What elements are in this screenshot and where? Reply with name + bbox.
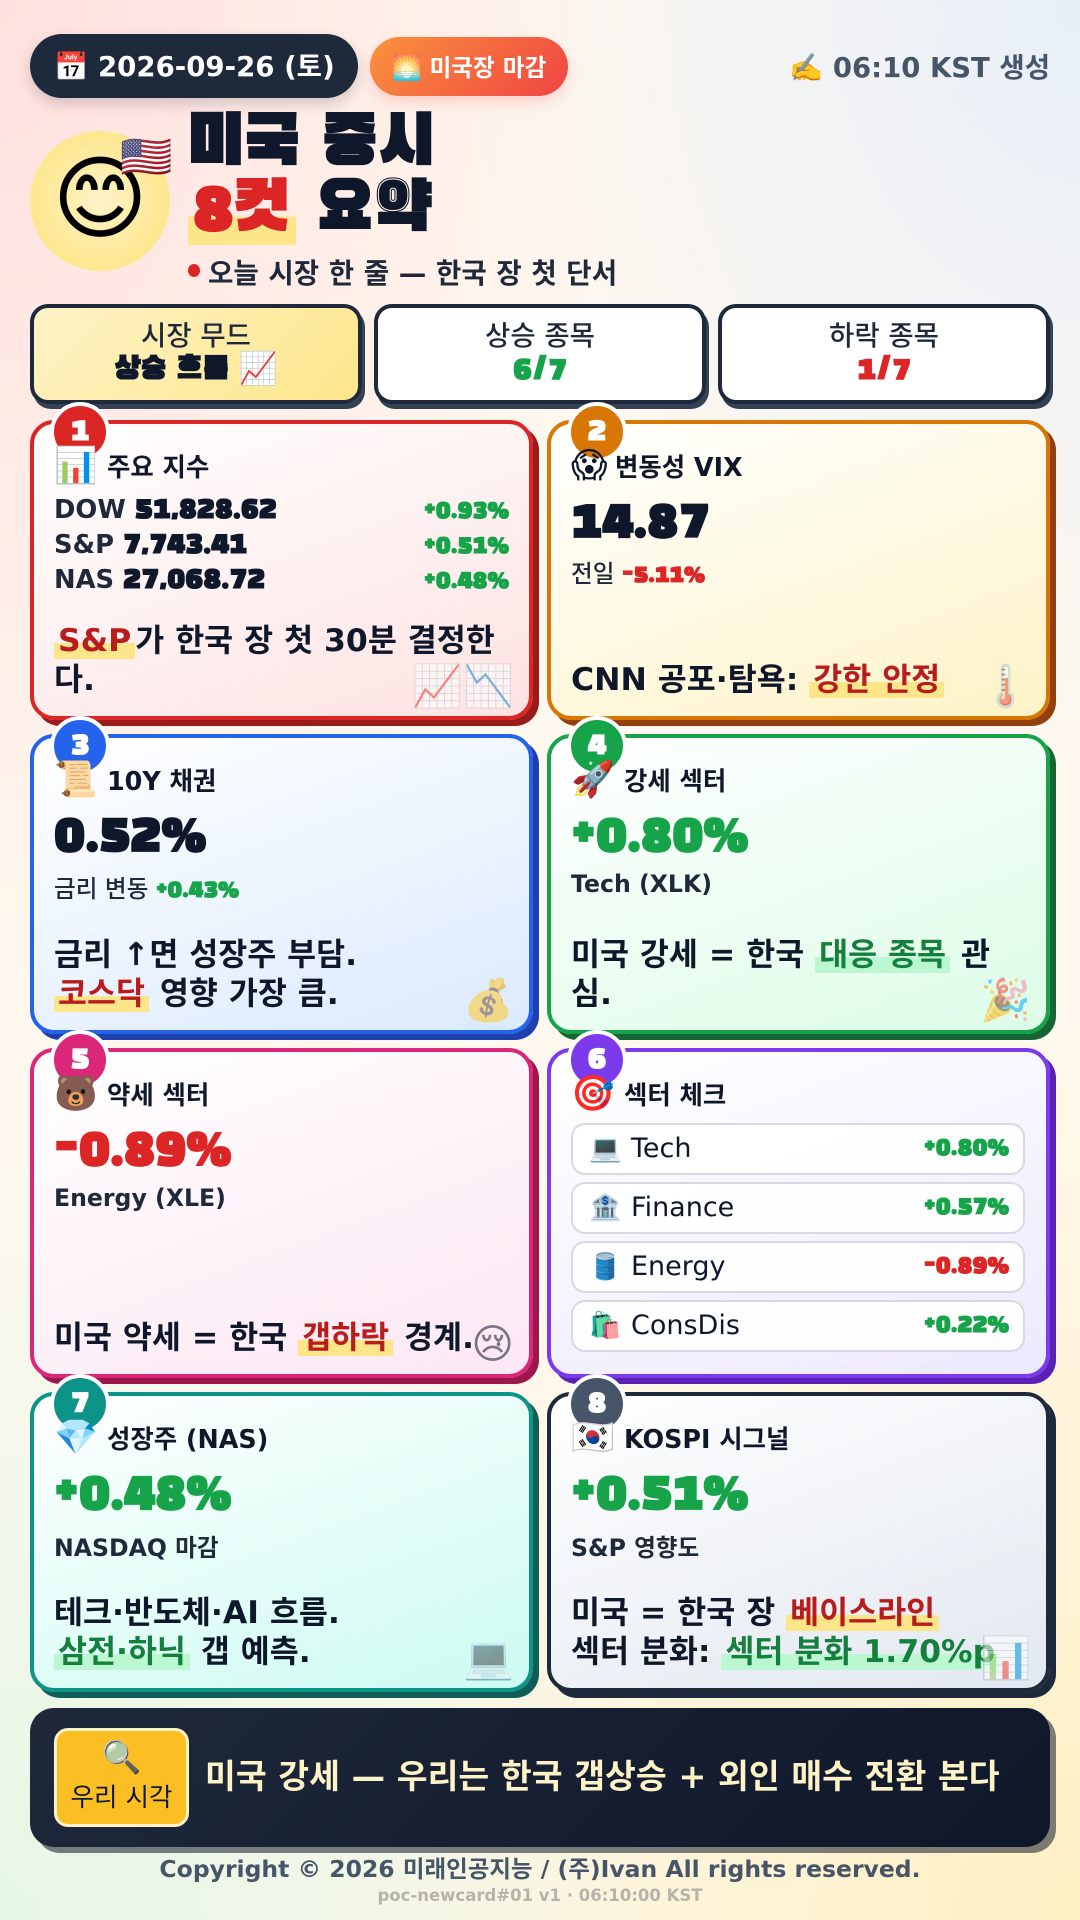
index row: DOW: DOW 51,828.62 [54, 495, 277, 525]
panel: growth stocks [30, 1392, 533, 1692]
sector row: Tech: 💻 [589, 1134, 621, 1164]
panel: 10Y bond [30, 734, 533, 1034]
badge 1: 1 [71, 416, 89, 447]
sector name: Tech (XLK) [571, 870, 712, 898]
badge 3 [50, 716, 110, 776]
card heading [54, 760, 216, 800]
strong sector value: +0.80% [571, 810, 748, 862]
card heading: 주요 지수 [107, 452, 209, 482]
icon: charts: 📈📉 [412, 662, 514, 710]
badge 6 [567, 1030, 627, 1090]
takeaway: 미국 약세 = 한국 갭하락 경계. [54, 1320, 474, 1356]
badge 2 [567, 402, 627, 462]
card heading [571, 1074, 726, 1114]
badge 4 [567, 716, 627, 776]
sector row: Tech: Tech [631, 1133, 691, 1164]
index row: S&P [54, 530, 509, 560]
card heading [571, 446, 743, 486]
takeaway: 금리 ↑면 성장주 부담. [54, 937, 357, 973]
build stamp: poc-newcard#01 v1 · 06:10:00 KST [377, 1886, 703, 1905]
index row: S&P: +0.51% [424, 534, 509, 559]
card heading: 📜 [54, 760, 98, 800]
badge 4: 4 [588, 730, 606, 761]
rate change: 금리 변동 +0.43% [54, 875, 239, 903]
badge 7: 7 [71, 1388, 89, 1419]
sector row: Energy: Energy [631, 1251, 726, 1282]
NASDAQ value: +0.48% [54, 1468, 231, 1520]
card heading: 📊 [54, 446, 98, 486]
label: 우리 시각 [71, 1783, 172, 1813]
takeaway: 섹터 분화: 섹터 분화 1.70%p [571, 1634, 995, 1670]
index row: DOW [54, 495, 509, 525]
card heading: 🇰🇷 [571, 1418, 615, 1458]
sector row: ConsDis: +0.22% [924, 1313, 1009, 1338]
panel: strong sector [547, 734, 1050, 1034]
status pill: US market closed: 🌅 미국장 마감 [392, 54, 546, 82]
badge 3: 3 [71, 730, 89, 761]
card heading: 성장주 (NAS) [107, 1424, 268, 1454]
badge 8 [567, 1374, 627, 1434]
icon: thermometer: 🌡️ [980, 662, 1031, 710]
our view label [54, 1728, 189, 1827]
date pill: 📅 2026-09-26 (토) [54, 50, 335, 83]
date pill [30, 34, 358, 98]
takeaway: 미국 = 한국 장 베이스라인 [571, 1595, 935, 1631]
takeaway: 미국 강세 = 한국 대응 종목 관심. [571, 937, 990, 1012]
mascot avatar [30, 131, 170, 271]
badge 2: 2 [588, 416, 606, 447]
card heading: 🐻 [54, 1074, 98, 1114]
weak sector value: -0.89% [54, 1124, 231, 1176]
icon: laptop: 💻 [463, 1634, 514, 1682]
panel: sector check [547, 1048, 1050, 1378]
badge 8: 8 [588, 1388, 606, 1419]
takeaway [571, 1595, 999, 1670]
KOSPI value: +0.51% [571, 1468, 748, 1520]
sector row: Energy [571, 1241, 1025, 1293]
sector row: Finance [571, 1182, 1025, 1234]
sub label: S&P 영향도 [571, 1534, 699, 1562]
sector row: ConsDis: ConsDis [631, 1310, 740, 1341]
stat: gainers [374, 304, 706, 404]
yield value: 0.52% [54, 810, 206, 862]
takeaway: 테크·반도체·AI 흐름. [54, 1595, 340, 1631]
icon: US flag: 🇺🇸 [120, 132, 172, 181]
tagline [188, 257, 617, 290]
card heading: 섹터 체크 [624, 1080, 726, 1110]
card heading: 🚀 [571, 760, 615, 800]
card heading: 변동성 VIX [615, 452, 743, 482]
title: 8컷 요약 [193, 177, 431, 245]
card heading: 🎯 [571, 1074, 615, 1114]
card heading [571, 760, 726, 800]
card heading: 😱 [571, 446, 608, 486]
index row: NAS: NAS 27,068.72 [54, 565, 265, 595]
sector row: Tech [571, 1123, 1025, 1175]
takeaway [54, 937, 357, 1012]
sector row: Finance: +0.57% [924, 1195, 1009, 1220]
stat: market mood [30, 304, 362, 404]
sector name: Energy (XLE) [54, 1184, 226, 1212]
sector row: ConsDis [571, 1300, 1025, 1352]
card heading: 💎 [54, 1418, 98, 1458]
badge 1 [50, 402, 110, 462]
panel: KOSPI signal [547, 1392, 1050, 1692]
card heading: 10Y 채권 [107, 766, 216, 796]
icon: money bag: 💰 [463, 976, 514, 1024]
panel: weak sector [30, 1048, 533, 1378]
sector row: Energy: -0.89% [924, 1254, 1009, 1279]
index row: NAS: +0.48% [424, 569, 509, 594]
index row: S&P: S&P 7,743.41 [54, 530, 247, 560]
VIX value: 14.87 [571, 496, 710, 548]
card heading [54, 1418, 268, 1458]
stat: losers: 1/7 [857, 354, 911, 386]
icon: party popper: 🎉 [980, 976, 1031, 1024]
title: 미국 증시 [188, 111, 434, 179]
sub label: NASDAQ 마감 [54, 1534, 219, 1562]
badge 5 [50, 1030, 110, 1090]
card heading: KOSPI 시그널 [624, 1424, 789, 1454]
red dot [188, 264, 200, 277]
index row: DOW: +0.93% [424, 499, 509, 524]
badge 6: 6 [588, 1044, 606, 1075]
stat: losers: 하락 종목 [829, 320, 939, 352]
icon: magnifier: 🔍 [102, 1738, 141, 1776]
sector row: Finance: 🏦 [589, 1193, 621, 1223]
stat: market mood: 시장 무드 [141, 320, 251, 352]
title [188, 111, 434, 245]
panel: VIX [547, 420, 1050, 720]
stat: losers [718, 304, 1050, 404]
card heading [571, 1418, 789, 1458]
card heading [54, 446, 209, 486]
icon: bar chart: 📊 [980, 1634, 1031, 1682]
previous-day change: 전일 -5.11% [571, 560, 705, 588]
takeaway: CNN 공포·탐욕: 강한 안정 [571, 662, 940, 698]
stat: gainers: 6/7 [513, 354, 567, 386]
card heading: 강세 섹터 [624, 766, 726, 796]
icon: sad face: 😢 [471, 1320, 514, 1368]
badge 5: 5 [71, 1044, 89, 1075]
index row: NAS [54, 565, 509, 595]
copyright: Copyright © 2026 미래인공지능 / (주)Ivan All rights reserved. [159, 1855, 921, 1883]
card heading [54, 1074, 209, 1114]
bottom conclusion bar [30, 1708, 1050, 1847]
card heading: 약세 섹터 [107, 1080, 209, 1110]
takeaway: 코스닥 영향 가장 큼. [58, 976, 339, 1012]
badge 7 [50, 1374, 110, 1434]
icon: smiling face: 😊 [53, 147, 147, 252]
stat: market mood: 상승 흐름 📈 [114, 354, 278, 386]
sector row: Finance: Finance [631, 1192, 734, 1223]
stat: gainers: 상승 종목 [485, 320, 595, 352]
sector row: ConsDis: 🛍️ [589, 1311, 621, 1341]
takeaway: 삼전·하닉 갭 예측. [58, 1634, 311, 1670]
generated time: ✍️ 06:10 KST 생성 [789, 52, 1050, 84]
sector row: Tech: +0.80% [924, 1136, 1009, 1161]
takeaway [54, 1595, 340, 1670]
takeaway: S&P가 한국 장 첫 30분 결정한다. [54, 623, 495, 698]
sector row: Energy: 🛢️ [589, 1252, 621, 1282]
conclusion text: 미국 강세 — 우리는 한국 갭상승 + 외인 매수 전환 본다 [205, 1757, 1000, 1796]
panel: major indices [30, 420, 533, 720]
status pill: US market closed [370, 37, 568, 96]
tagline text: 오늘 시장 한 줄 — 한국 장 첫 단서 [208, 257, 617, 290]
